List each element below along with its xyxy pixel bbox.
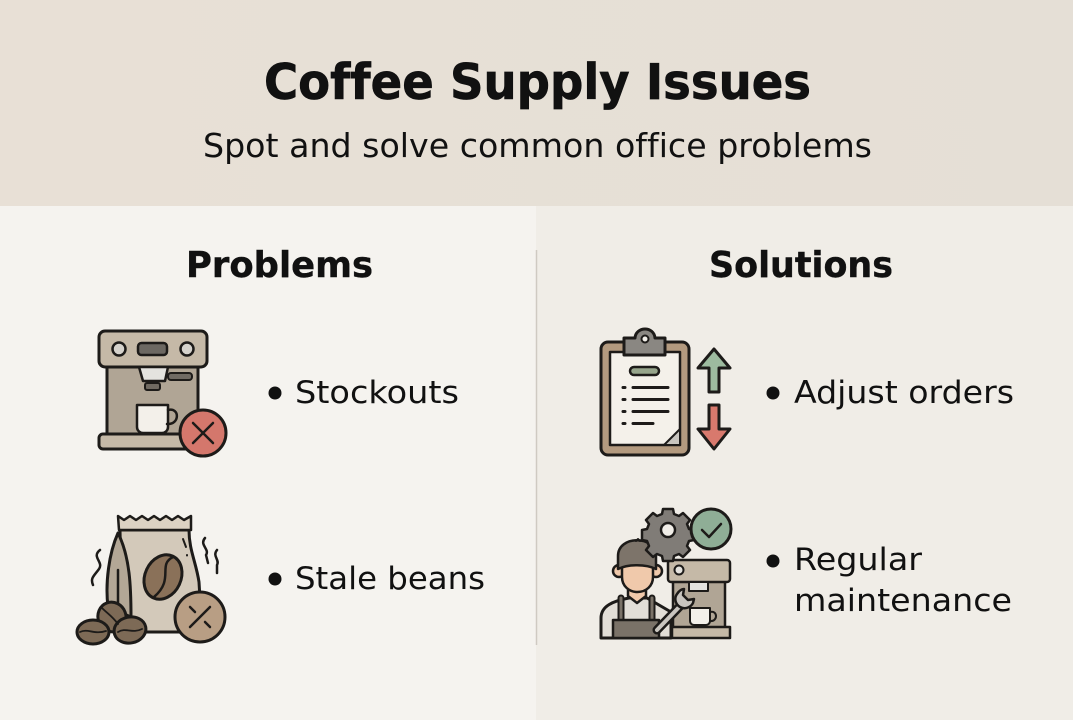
label: adjust orders: Adjust orders: [794, 375, 1014, 411]
label: regular maintenance: [794, 542, 1012, 619]
icon: clipboard with arrows: [601, 329, 730, 455]
label: stockouts: Stockouts: [295, 375, 459, 411]
label: regular maintenance: Regular: [794, 542, 922, 578]
icon: coffee machine with red x: [99, 331, 226, 456]
heading: problems: Problems: [186, 245, 373, 286]
header band: [0, 0, 1073, 206]
bullet: regular maintenance: [766, 554, 780, 568]
icon: technician with coffee machine: [601, 509, 731, 638]
subtitle: Spot and solve common office problems: [203, 126, 872, 165]
panel: solutions: [536, 206, 1073, 720]
panel: problems: [0, 206, 536, 720]
icon: stale coffee bag: [77, 516, 225, 646]
label: regular maintenance: maintenance: [794, 583, 1012, 619]
label: stale beans: Stale beans: [295, 561, 485, 597]
title: Coffee Supply Issues: [264, 54, 811, 111]
bullet: stale beans: [268, 572, 282, 586]
bullet: stockouts: [268, 386, 282, 400]
heading: solutions: Solutions: [709, 245, 893, 286]
bullet: adjust orders: [766, 386, 780, 400]
